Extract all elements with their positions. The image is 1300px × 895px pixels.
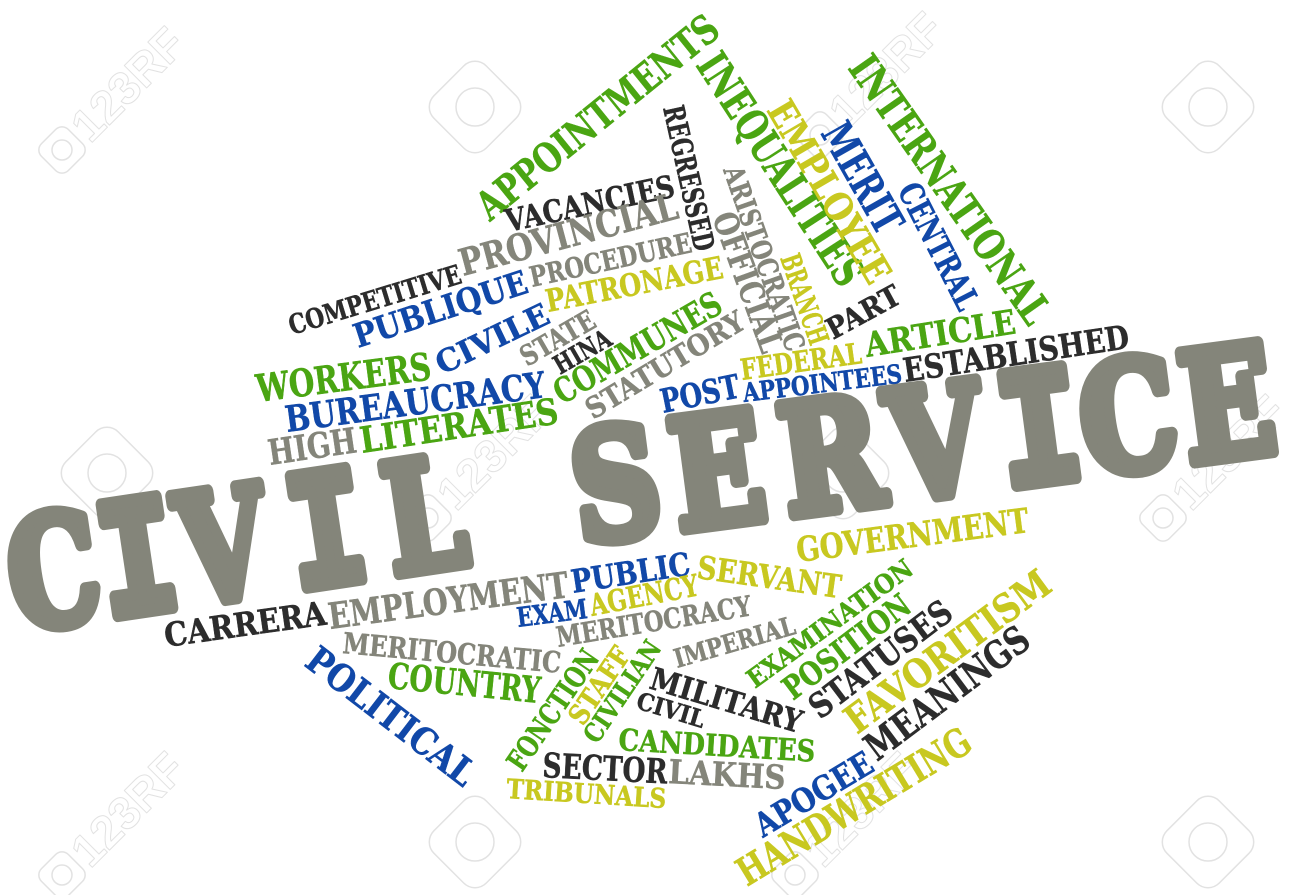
words below headline: MEANINGS	[855, 616, 1038, 769]
words below headline: CIVILIAN	[578, 635, 668, 749]
words above headline: HIGH	[265, 420, 359, 474]
headline: civil service	[0, 312, 1287, 682]
words below headline: STATUSES	[801, 592, 961, 727]
words above headline: ARISTOCRATIC	[716, 161, 812, 355]
words above headline: STATUTORY	[579, 304, 751, 426]
words below headline: FAVORITISM	[836, 561, 1060, 743]
words below headline: SECTOR	[542, 746, 669, 793]
words above headline: VACANCIES	[501, 169, 678, 240]
words below headline: MERITOCRATIC	[341, 626, 563, 680]
watermarks: 123RF	[427, 385, 561, 519]
words below headline: TRIBUNALS	[506, 774, 667, 815]
words below headline: STAFF	[561, 640, 638, 731]
words below headline: PUBLIC	[568, 545, 693, 601]
headline: civil service: SERVICE	[561, 312, 1287, 594]
words above headline: INEQUALITIES	[686, 44, 874, 296]
words below headline: EMPLOYMENT	[326, 564, 571, 638]
words above headline: EMPLOYEE	[758, 92, 901, 291]
words below headline: MILITARY	[646, 661, 807, 741]
words above headline: CENTRAL	[890, 176, 987, 317]
words below headline: MERITOCRACY	[554, 589, 754, 654]
words above headline: FEDERAL	[738, 336, 864, 387]
words below headline: EXAMINATION	[741, 554, 919, 695]
words below headline: CANDIDATES	[618, 723, 816, 770]
words below headline: GOVERNMENT	[794, 501, 1031, 571]
words below headline	[162, 501, 1060, 895]
words above headline: PATRONAGE	[543, 250, 726, 320]
words below headline: COUNTRY	[386, 655, 543, 712]
watermarks: 123RF	[61, 17, 195, 151]
words above headline: HINA	[548, 324, 618, 381]
words below headline: AGENCY	[586, 568, 702, 624]
words above headline	[253, 5, 1132, 474]
words above headline: PROVINCIAL	[454, 184, 683, 285]
words above headline: INTERNATIONAL	[839, 46, 1061, 333]
headline: civil service: CIVIL	[0, 424, 479, 682]
words below headline: SERVANT	[695, 548, 844, 606]
words below headline: EXAM	[515, 594, 589, 634]
watermarks: 123RF	[1162, 385, 1296, 519]
words above headline: OFFICIAL	[704, 206, 791, 358]
words above headline: REGRESSED	[656, 102, 721, 254]
words above headline: BUREAUCRACY	[283, 364, 549, 441]
words above headline: WORKERS	[253, 344, 434, 411]
words below headline: FONCTION	[500, 643, 606, 777]
words above headline: PROCEDURE	[526, 226, 695, 294]
words below headline: IMPERIAL	[671, 611, 799, 675]
words above headline: PUBLIQUE	[348, 263, 533, 356]
words above headline: CIVILE	[430, 297, 555, 382]
words below headline: HANDWRITING	[728, 718, 980, 895]
words above headline: COMMUNES	[546, 284, 729, 413]
words below headline: LAKHS	[668, 752, 786, 797]
words below headline: POSITION	[775, 586, 918, 707]
words above headline: POST	[657, 367, 743, 421]
words below headline: POLITICAL	[298, 637, 485, 795]
words above headline: STATE	[514, 303, 602, 373]
words above headline: COMPETITIVE	[285, 260, 465, 342]
watermarks: 123RF	[819, 2, 953, 136]
words above headline: ESTABLISHED	[900, 317, 1132, 390]
words below headline: APOGEE	[746, 743, 880, 845]
words above headline: PART	[820, 278, 907, 346]
watermarks: 123RF	[61, 742, 195, 876]
words above headline: APPOINTEES	[740, 360, 904, 409]
words above headline: LITERATES	[357, 390, 561, 462]
words below headline: CARRERA	[162, 594, 329, 655]
words below headline: CIVIL	[633, 686, 709, 734]
words above headline: MERIT	[810, 114, 913, 243]
words above headline: ARTICLE	[861, 303, 1019, 366]
words above headline: BRANCH	[773, 250, 835, 349]
watermarks: 123RF	[794, 742, 928, 876]
